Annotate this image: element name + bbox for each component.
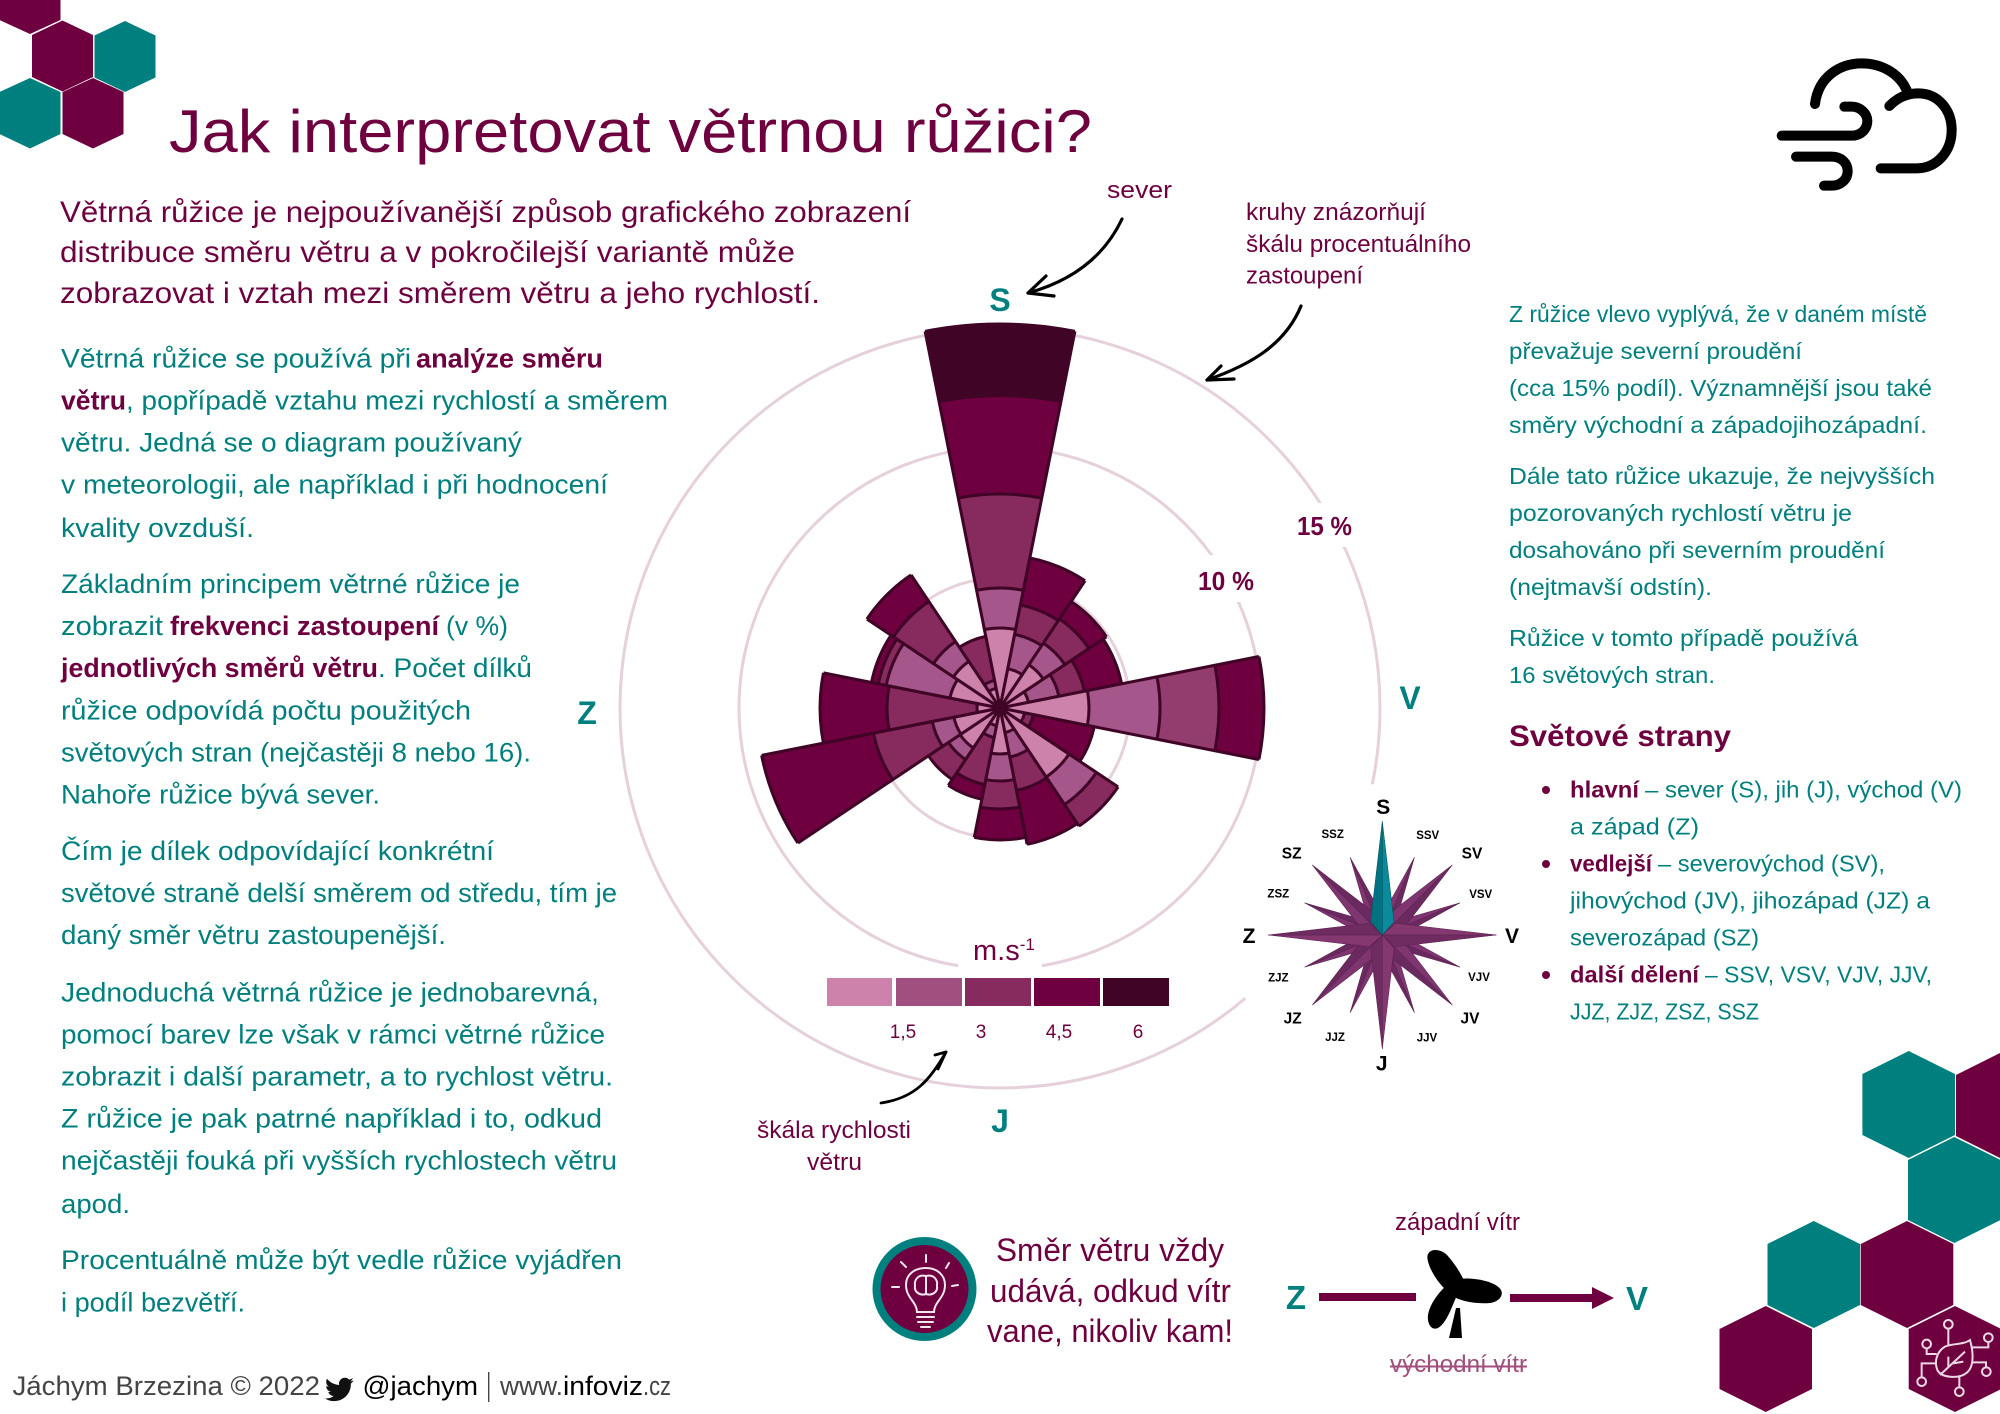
label: V: V <box>1626 1280 1648 1317</box>
label: speed scale <box>757 1117 911 1176</box>
cardinal direction letters around the rose: Z <box>577 695 597 731</box>
footer: credits: .cz <box>643 1371 671 1401</box>
percent labels: 10 % <box>1198 566 1254 596</box>
icon: leaf with circuits <box>1917 1320 1993 1396</box>
list: world directions: – sever (S), jih (J), východ (V) <box>1645 776 1962 802</box>
text block: calm share <box>61 1245 622 1317</box>
list: world directions: – SSV, VSV, VJV, JJV, <box>1705 962 1932 988</box>
compass rose: Z <box>1243 925 1256 948</box>
callout: wind direction note: vane, nikoliv kam! <box>987 1313 1233 1349</box>
legend: wind speed scale <box>827 935 1169 1043</box>
wind rose chart <box>760 322 1266 846</box>
arrow: wind leaving turbine <box>1510 1287 1614 1309</box>
cardinal direction letters around the rose: S <box>989 282 1011 318</box>
right text: reading the rose: Růžice v tomto případě používá <box>1509 625 1858 651</box>
compass rose: V <box>1505 925 1519 948</box>
compass rose: JJZ <box>1325 1032 1345 1044</box>
list: world directions: – severovýchod (SV), <box>1658 850 1885 876</box>
legend: wind speed scale: -1 <box>1020 935 1035 954</box>
compass rose <box>1243 796 1519 1076</box>
label: circles meaning: kruhy znázorňují <box>1246 199 1426 226</box>
footer: credits: infoviz <box>563 1371 643 1401</box>
text block: use of the wind rose: v meteorologii, ale například i při hodnocení <box>61 470 609 500</box>
intro text: distribuce směru větru a v pokročilejší variantě může <box>60 236 795 269</box>
callout: wind direction note: udává, odkud vítr <box>990 1273 1231 1309</box>
text block: basic principle: Základním principem větrné růžice je <box>61 569 520 599</box>
text block: basic principle <box>60 569 532 810</box>
compass rose: JJV <box>1417 1032 1438 1044</box>
icon: wind and cloud <box>1782 63 1952 186</box>
compass rose: ZSZ <box>1267 888 1289 900</box>
label: speed scale: škála rychlosti <box>757 1117 911 1144</box>
compass rose: ZJZ <box>1268 972 1289 984</box>
cardinal direction letters around the rose: V <box>1399 680 1421 716</box>
list: world directions: jihovýchod (JV), jihozápad (JZ) a <box>1569 888 1930 914</box>
compass rose: VSV <box>1469 889 1493 901</box>
text block: colours and wind speed: nejčastěji fouká při vyšších rychlostech větru <box>61 1146 617 1176</box>
intro text: Větrná růžice je nejpoužívanější způsob grafického zobrazení <box>60 196 912 229</box>
icon: wind turbine <box>1427 1250 1502 1338</box>
callout: wind direction note: Směr větru vždy <box>996 1232 1224 1268</box>
text block: basic principle: (v %) <box>446 611 508 641</box>
text block: basic principle: světových stran (nejčastěji 8 nebo 16). <box>61 738 531 768</box>
legend: wind speed scale: 1,5 <box>890 1022 916 1043</box>
text block: colours and wind speed: apod. <box>61 1189 130 1219</box>
right text: reading the rose: Dále tato růžice ukazuje, že nejvyšších <box>1509 463 1935 489</box>
label: Z: Z <box>1286 1279 1306 1316</box>
right text: reading the rose: směry východní a západojihozápadní. <box>1509 412 1927 438</box>
footer: credits: Jáchym Brzezina © 2022 <box>12 1371 320 1401</box>
right text: reading the rose: (nejtmavší odstín). <box>1509 574 1712 600</box>
list: world directions: další dělení <box>1570 962 1701 988</box>
hexagons top-left <box>0 0 156 148</box>
legend: wind speed scale: m.s <box>973 935 1020 967</box>
right text: reading the rose: (cca 15% podíl). Významnější jsou také <box>1509 375 1932 401</box>
arrow: wind to turbine <box>1319 1293 1416 1301</box>
list: world directions: a západ (Z) <box>1570 814 1699 840</box>
hexagons bottom-right <box>1720 1051 2000 1412</box>
percent labels: 15 % <box>1297 511 1352 541</box>
label: circles meaning <box>1246 199 1471 290</box>
text block: sector length: daný směr větru zastoupenější. <box>61 920 446 950</box>
list: world directions <box>1542 776 1962 1024</box>
text block: sector length <box>61 835 617 950</box>
footer: credits: www. <box>499 1371 563 1401</box>
icon: light bulb with brain <box>876 1241 972 1337</box>
heading: world directions: Světové strany <box>1509 720 1731 753</box>
intro text <box>60 196 912 310</box>
text block: calm share: Procentuálně může být vedle růžice vyjádřen <box>61 1245 622 1275</box>
text block: use of the wind rose: větru <box>61 386 126 416</box>
intro text: zobrazovat i vztah mezi směrem větru a jeho rychlostí. <box>60 277 820 310</box>
compass rose: SV <box>1462 846 1483 862</box>
cardinal direction letters around the rose <box>577 282 1421 1139</box>
legend: wind speed scale: 4,5 <box>1046 1022 1072 1043</box>
text block: use of the wind rose: Větrná růžice se používá při <box>61 343 411 373</box>
arrow: sever <box>1028 219 1122 296</box>
text block: basic principle: růžice odpovídá počtu použitých <box>61 695 471 725</box>
compass rose: J <box>1376 1052 1388 1076</box>
legend: wind speed scale: 3 <box>976 1022 986 1043</box>
compass rose: VJV <box>1468 972 1490 984</box>
text block: basic principle: frekvenci zastoupení <box>170 611 441 641</box>
text block: use of the wind rose: analýze směru <box>416 343 603 373</box>
compass rose: SSZ <box>1322 829 1344 841</box>
compass rose: SZ <box>1282 846 1302 862</box>
text block: basic principle: . Počet dílků <box>378 653 532 683</box>
text block: use of the wind rose: , popřípadě vztahu mezi rychlostí a směrem <box>126 386 668 416</box>
label: sever: sever <box>1107 177 1172 204</box>
text block: basic principle: zobrazit <box>61 611 164 641</box>
label: circles meaning: škálu procentuálního <box>1246 231 1471 258</box>
list: world directions: JJZ, ZJZ, ZSZ, SSZ <box>1570 998 1759 1024</box>
text block: calm share: i podíl bezvětří. <box>61 1287 245 1317</box>
title: Jak interpretovat větrnou růžici? <box>169 98 1092 165</box>
list: world directions: hlavní <box>1570 776 1641 802</box>
right text: reading the rose <box>1509 301 1935 688</box>
text block: colours and wind speed: pomocí barev lze však v rámci větrné růžice <box>61 1019 605 1049</box>
list: world directions: severozápad (SZ) <box>1570 924 1759 950</box>
label: eastern wind struck through: východní vítr <box>1390 1351 1527 1378</box>
right text: reading the rose: 16 světových stran. <box>1509 662 1715 688</box>
text block: basic principle: Nahoře růžice bývá sever. <box>61 780 380 810</box>
text block: colours and wind speed: Z růžice je pak patrné například i to, odkud <box>61 1104 602 1134</box>
text block: colours and wind speed: zobrazit i další parametr, a to rychlost větru. <box>61 1062 613 1092</box>
footer: credits <box>12 1371 671 1402</box>
footer: credits: @jachym <box>362 1371 478 1401</box>
label: western wind: západní vítr <box>1395 1209 1520 1236</box>
label: speed scale: větru <box>807 1149 862 1176</box>
right text: reading the rose: dosahováno při severním proudění <box>1509 537 1886 563</box>
compass rose: S <box>1376 796 1390 819</box>
compass rose: JV <box>1461 1010 1480 1028</box>
callout: wind direction note <box>987 1232 1233 1349</box>
right text: reading the rose: pozorovaných rychlostí větru je <box>1509 500 1852 526</box>
percentage rings <box>620 328 1533 1088</box>
percent labels <box>1198 511 1352 596</box>
label: circles meaning: zastoupení <box>1246 262 1363 290</box>
compass rose: JZ <box>1284 1010 1302 1028</box>
right text: reading the rose: Z růžice vlevo vyplývá, že v daném místě <box>1509 301 1927 327</box>
text block: use of the wind rose: větru. Jedná se o diagram používaný <box>61 428 523 458</box>
text block: use of the wind rose: kvality ovzduší. <box>61 513 254 543</box>
list: world directions: vedlejší <box>1570 850 1654 876</box>
compass rose: SSV <box>1416 830 1440 842</box>
right text: reading the rose: převažuje severní proudění <box>1509 338 1803 364</box>
arrow: circles <box>1207 306 1301 380</box>
text block: sector length: Čím je dílek odpovídající konkrétní <box>61 835 495 866</box>
legend: wind speed scale: 6 <box>1133 1022 1143 1043</box>
text block: sector length: světové straně delší směrem od středu, tím je <box>61 878 617 908</box>
text block: basic principle: jednotlivých směrů větru <box>60 653 378 683</box>
text block: colours and wind speed <box>61 977 617 1219</box>
cardinal direction letters around the rose: J <box>991 1103 1009 1139</box>
arrow: speed scale <box>881 1052 946 1103</box>
text block: colours and wind speed: Jednoduchá větrná růžice je jednobarevná, <box>61 977 599 1007</box>
text block: use of the wind rose <box>61 343 668 543</box>
